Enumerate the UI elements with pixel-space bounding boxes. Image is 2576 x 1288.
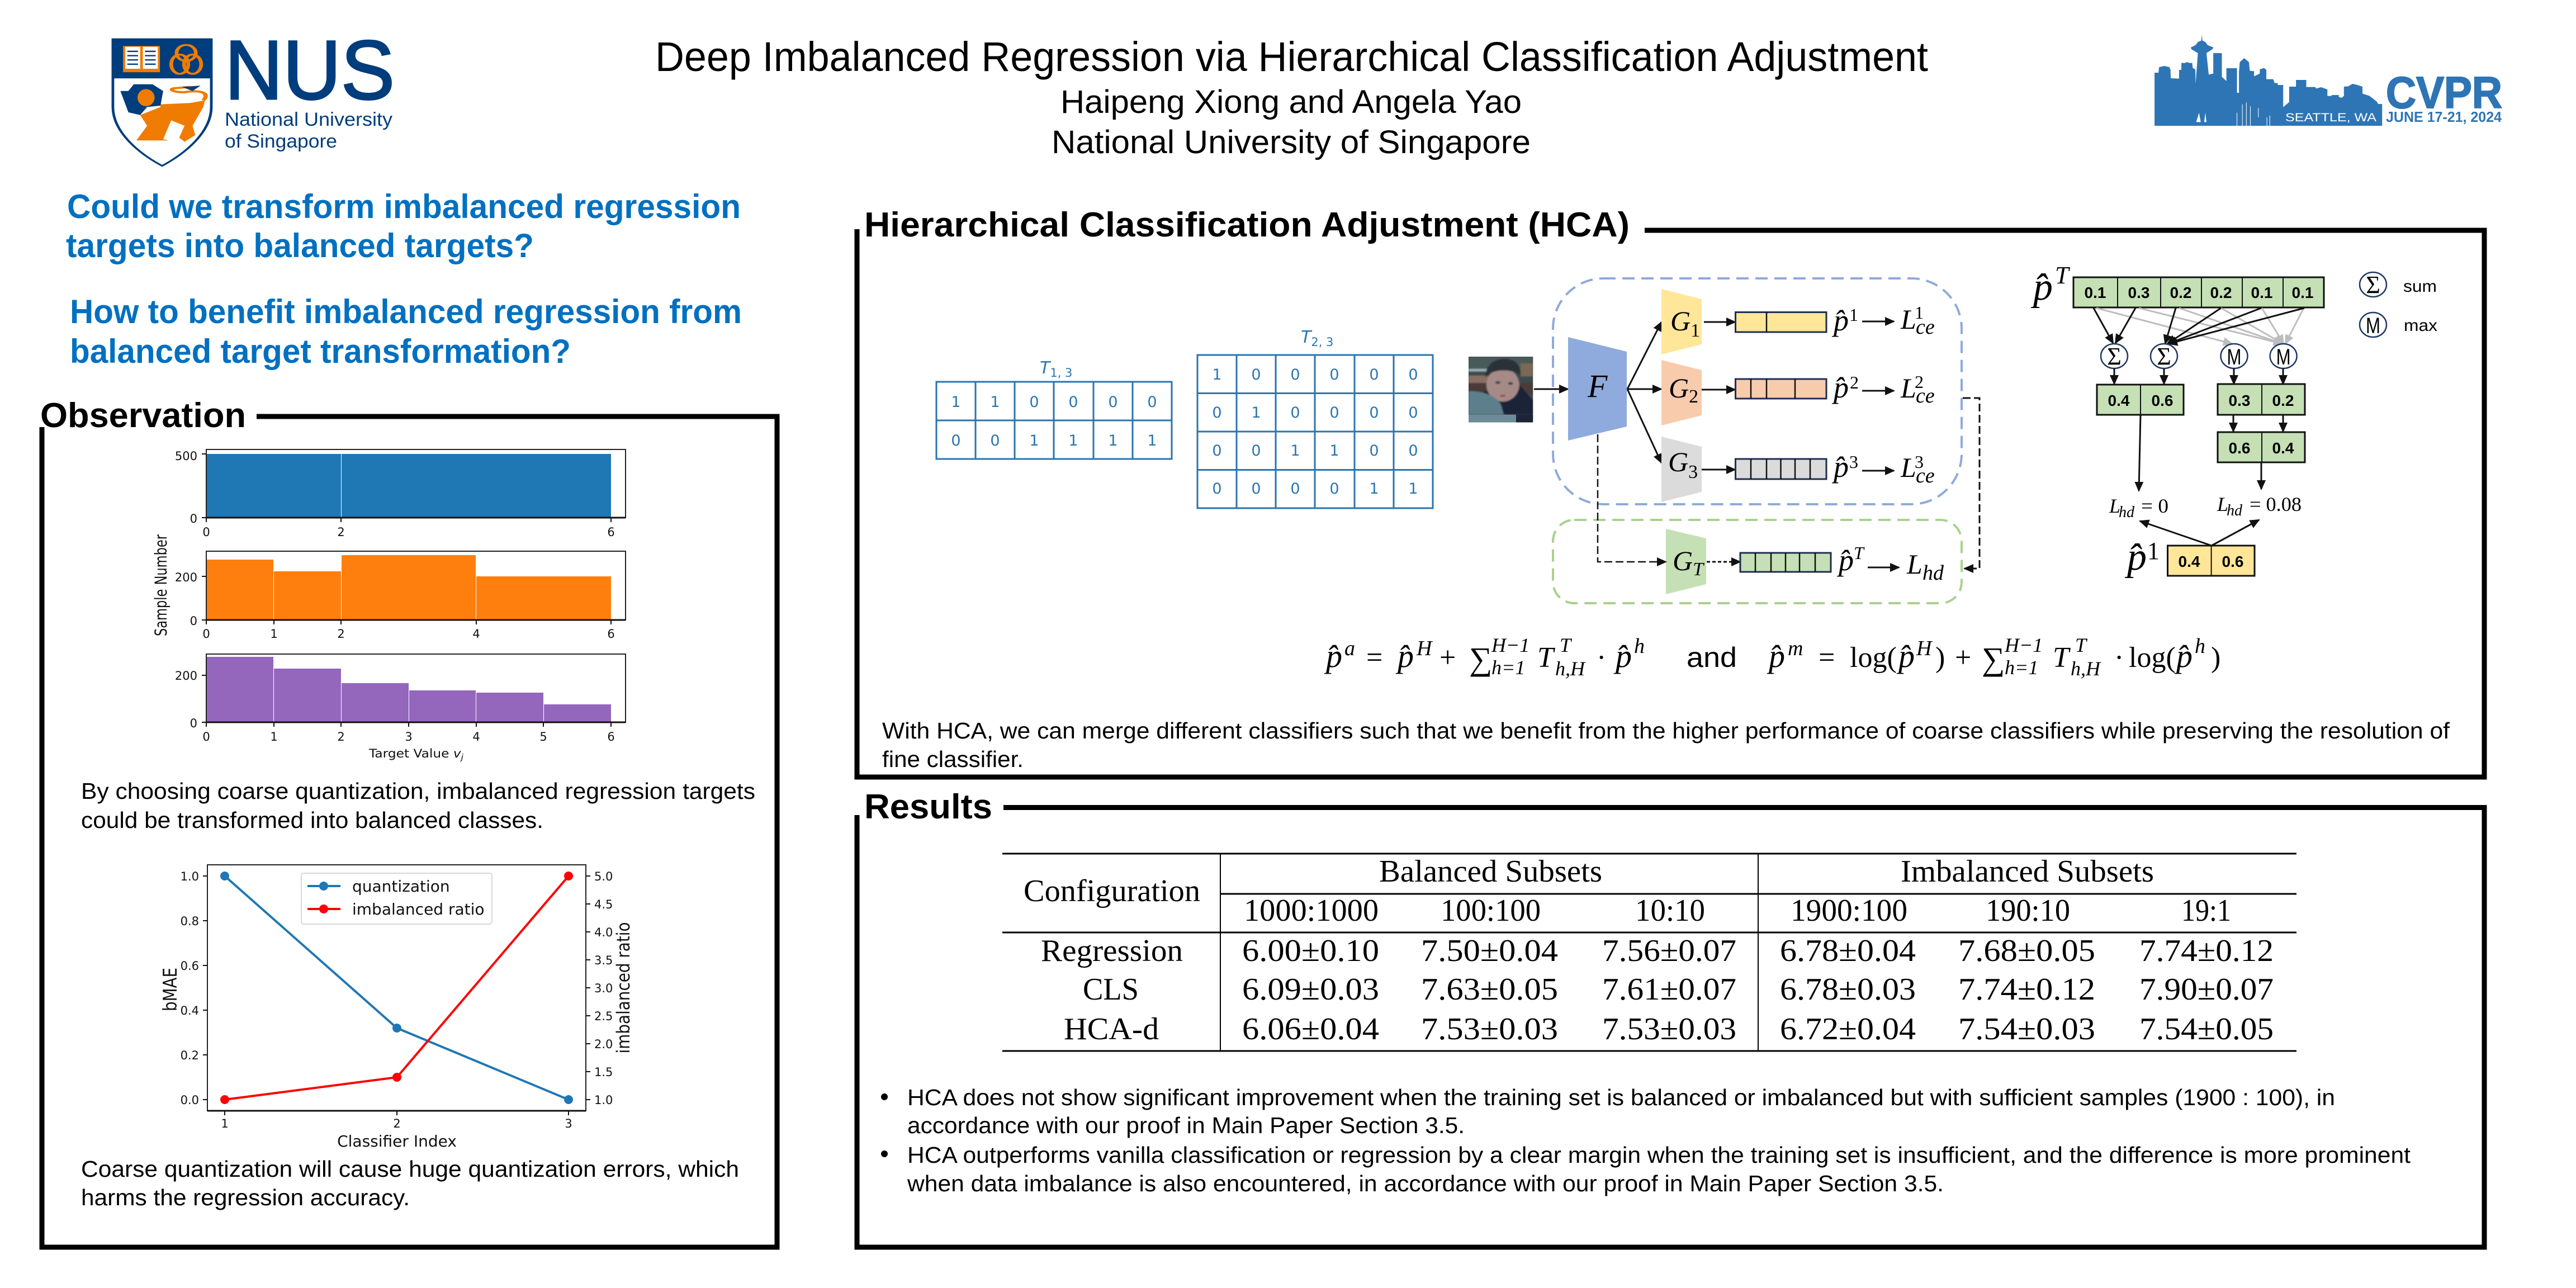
loss label: Lhd = 0.08 (2217, 493, 2302, 519)
legend: sum and max: max (2404, 316, 2437, 335)
results table: 6.06±0.04 (1242, 1012, 1379, 1046)
classifier G3 (1661, 437, 1935, 502)
results table: 190:10 (1986, 893, 2070, 928)
panel border (42, 416, 777, 1247)
question 2: balanced target transformation? (70, 333, 571, 370)
matrix T2,3: 0 (1329, 480, 1339, 498)
dashed group: transformed classifier (1553, 520, 1962, 603)
classifier G3: 3 (1915, 452, 1924, 472)
classifier GT (1666, 529, 1944, 594)
matrix T2,3: 2, 3 (1311, 335, 1333, 349)
classifier GT: G (1673, 545, 1693, 576)
line chart: quantization vs imbalanced ratio: 0.6 (181, 959, 199, 973)
line chart: quantization vs imbalanced ratio: 1.0 (181, 870, 199, 883)
line chart: quantization vs imbalanced ratio: 4.0 (594, 926, 613, 939)
line chart: quantization vs imbalanced ratio: bMAE (159, 968, 182, 1011)
box: normalized result: 0.4 (2272, 439, 2294, 457)
dashed arrow: classifiers to Lhd (1963, 398, 1980, 569)
equations: p̂ (2174, 638, 2193, 674)
histogram 1: blue: 0 (202, 525, 210, 539)
histogram 1: blue: 500 (175, 449, 197, 463)
logo text: of Singapore: of Singapore (225, 131, 337, 152)
research questions (66, 188, 742, 370)
equations: log( (2129, 642, 2176, 674)
equations: h (2195, 634, 2205, 658)
matrix T1,3: 1 (1068, 432, 1078, 449)
equations: a (1344, 637, 1355, 660)
matrix T2,3: 0 (1329, 366, 1339, 383)
matrix T2,3: 0 (1408, 404, 1418, 422)
histogram 3: purple: 0 (190, 717, 197, 730)
histogram 2: orange: 200 (175, 571, 197, 584)
label: p-hat T: p̂ (2030, 266, 2053, 309)
equations: ∑ (1469, 641, 1492, 677)
equations: log( (1850, 642, 1897, 674)
results table: 6.78±0.03 (1780, 972, 1916, 1007)
results table: 6.72±0.04 (1780, 1012, 1916, 1046)
logo: NUS (113, 23, 395, 166)
results table: 7.53±0.03 (1421, 1012, 1558, 1046)
box: max result (2218, 384, 2305, 415)
box: coarse classifier output: 0.4 (2179, 553, 2200, 570)
legend: sum and max: sum (2403, 277, 2437, 296)
classifier G3: L (1900, 452, 1916, 483)
classifier G2: L (1900, 372, 1916, 404)
equations: p̂ (1613, 638, 1632, 674)
results table: HCA-d (1064, 1012, 1159, 1046)
classifier G1: 1 (1849, 305, 1858, 325)
histogram 3: purple: 200 (175, 669, 197, 683)
matrix T1,3: 0 (1029, 394, 1039, 411)
question 1: targets into balanced targets? (66, 227, 534, 264)
histogram 3: purple: 0 (202, 730, 210, 744)
arrows: p1 to losses (2140, 520, 2259, 546)
classifier GT: T (1693, 559, 1704, 580)
results table: 7.56±0.07 (1602, 934, 1736, 968)
matrix T1,3: 0 (1068, 394, 1078, 411)
results table: 7.54±0.03 (1958, 1012, 2095, 1046)
authors: Haipeng Xiong and Angela Yao (1060, 84, 1522, 120)
results table: Regression (1041, 934, 1183, 968)
dashed group: classifiers (1553, 278, 1962, 504)
results table: 7.53±0.03 (1602, 1012, 1736, 1046)
equations: H (1916, 637, 1933, 660)
matrix T1,3: 0 (1147, 394, 1157, 411)
matrix T2,3: T (1301, 328, 1311, 347)
matrix T2,3: 0 (1290, 404, 1300, 422)
axis label: Target Value: Target Value v (369, 747, 460, 760)
box: normalized result: 0.6 (2229, 439, 2250, 457)
line chart: quantization vs imbalanced ratio: 1.5 (594, 1066, 613, 1079)
matrix T1,3: 0 (1108, 394, 1118, 411)
equations: H (1416, 637, 1433, 660)
classifier G2 (1661, 360, 1935, 425)
histogram 1: blue (175, 449, 626, 539)
arrow: image to backbone (1534, 388, 1568, 390)
bar: transformed probabilities: 0.2 (2210, 284, 2232, 301)
results table: 7.61±0.07 (1602, 972, 1736, 1007)
results table: CLS (1083, 972, 1139, 1007)
affiliation: National University of Singapore (1052, 124, 1531, 160)
classifier G1 (1661, 289, 1935, 354)
bar: transformed probabilities: 0.1 (2251, 284, 2272, 301)
bullet 2 (881, 1142, 2411, 1196)
bullet 1: accordance with our proof in Main Paper Section 3.5. (907, 1112, 1465, 1138)
histogram 2: orange (175, 551, 626, 641)
bar: transformed probabilities: 0.1 (2292, 284, 2313, 301)
histogram 1: blue: 6 (607, 525, 615, 539)
bar: transformed probabilities (2073, 277, 2324, 307)
title: Deep Imbalanced Regression via Hierarchical Classification Adjustment (655, 34, 1928, 80)
bullet 2: when data imbalance is also encountered, in accordance with our proof in Main Paper Section 3.5. (907, 1171, 1944, 1196)
matrix T2,3: 0 (1408, 442, 1418, 460)
equations: + (1955, 642, 1971, 674)
line chart: quantization vs imbalanced ratio: 4.5 (594, 898, 613, 911)
bullet 2: HCA outperforms vanilla classification or regression by a clear margin when the training set is insufficient, and the difference is more prominent (907, 1142, 2411, 1168)
line chart: quantization vs imbalanced ratio: 0.4 (181, 1004, 199, 1017)
line chart: quantization vs imbalanced ratio: Classifier Index (337, 1132, 457, 1150)
equations: h=1 (1491, 656, 1525, 679)
results table: 7.74±0.12 (1958, 972, 2095, 1007)
histogram 2: orange: 1 (270, 627, 278, 641)
panel border (857, 229, 2484, 777)
arrows: gray to max nodes (2096, 308, 2304, 344)
box: summed result: 0.6 (2152, 392, 2173, 409)
block: backbone F: F (1587, 368, 1608, 404)
equations: + (1439, 642, 1456, 674)
histogram 2: orange: 4 (472, 627, 480, 641)
diagram: aggregation example (2030, 262, 2437, 579)
matrix T2,3: 0 (1251, 366, 1261, 383)
panel: Results (857, 788, 2484, 1247)
heading: Results: Results (864, 788, 992, 826)
histogram 3: purple: 4 (472, 730, 480, 744)
heading: Observation: Observation (40, 396, 246, 435)
bar: transformed probabilities: 0.2 (2170, 284, 2191, 301)
classifier G2: ce (1916, 384, 1935, 408)
classifier G3: 3 (1849, 452, 1858, 472)
histogram 1: blue: 2 (337, 525, 345, 539)
line chart: quantization vs imbalanced ratio: 1.0 (594, 1093, 613, 1107)
results table: Balanced Subsets (1379, 854, 1602, 889)
equations: ) (2211, 642, 2220, 674)
line chart: quantization vs imbalanced ratio: quantization (352, 877, 450, 896)
matrix T1,3: 1 (1108, 432, 1118, 449)
histogram 1: blue: 0 (190, 512, 197, 525)
classifier G3: p̂ (1831, 450, 1849, 484)
matrix T1,3: 1 (990, 394, 1000, 411)
text: quantization error observation: harms the regression accuracy. (81, 1185, 410, 1210)
line chart: quantization vs imbalanced ratio: 2.0 (594, 1038, 613, 1051)
histogram 3: purple: 1 (270, 730, 278, 744)
matrix T1,3: T (1040, 358, 1050, 378)
equations (1324, 634, 2220, 680)
histogram 2: orange: 2 (337, 627, 345, 641)
line chart: quantization vs imbalanced ratio: 5.0 (594, 870, 613, 883)
equations: T (1560, 634, 1573, 656)
panel: Observation (40, 396, 777, 1247)
axis label: Sample Number: Sample Number (151, 534, 171, 636)
line chart: quantization vs imbalanced ratio: 0.0 (181, 1093, 199, 1107)
matrix T2,3: 1 (1290, 442, 1300, 460)
results table: Imbalanced Subsets (1901, 854, 2154, 889)
results table: 7.54±0.05 (2139, 1012, 2274, 1046)
logo text: date: JUNE 17-21, 2024 (2386, 108, 2502, 125)
legend: sum and max (2360, 271, 2437, 338)
matrix T2,3 (1197, 328, 1433, 508)
line chart: quantization vs imbalanced ratio: 2.5 (594, 1010, 613, 1023)
icon: NUS shield (113, 39, 211, 166)
equations: H−1 (1491, 634, 1530, 656)
results table: 7.63±0.05 (1421, 972, 1558, 1007)
text: balanced classes observation: could be transformed into balanced classes. (81, 807, 543, 833)
matrix T2,3: 0 (1329, 404, 1339, 422)
label: p-hat 1 (2124, 536, 2160, 579)
matrix T2,3: 1 (1408, 480, 1418, 498)
label: p-hat T: T (2055, 262, 2071, 289)
equations: h,H (1555, 657, 1586, 680)
classifier G1: 1 (1690, 320, 1700, 341)
logo: CVPR 2024 Seattle (2154, 35, 2502, 126)
nodes: sum and max: Σ (2157, 343, 2171, 370)
matrix T2,3: 1 (1369, 480, 1379, 498)
matrix T2,3: 0 (1369, 366, 1379, 383)
line chart: quantization vs imbalanced ratio: 3 (565, 1117, 572, 1130)
equations: · (1597, 642, 1606, 674)
matrix T2,3: 0 (1251, 442, 1261, 460)
matrix T1,3: 0 (951, 432, 961, 449)
legend: sum and max: M (2366, 314, 2380, 338)
logo wordmark NUS: NUS (225, 23, 395, 117)
equations: T (1537, 642, 1555, 674)
matrix T2,3: 1 (1251, 404, 1261, 422)
label: p-hat 1: p̂ (2124, 536, 2147, 579)
arrows: backbone to classifiers (1627, 322, 1661, 463)
equations: H−1 (2004, 634, 2043, 656)
histogram 3: purple: 2 (337, 730, 345, 744)
line chart: quantization vs imbalanced ratio: 0.8 (181, 915, 199, 928)
equations: h=1 (2005, 656, 2038, 679)
equations: h (1634, 634, 1645, 658)
loss label: Lhd = 0: L (2109, 495, 2120, 517)
histogram 3: purple: 3 (405, 730, 413, 744)
bullet 1 (881, 1085, 2335, 1138)
box: summed result: 0.4 (2108, 392, 2130, 409)
matrix T2,3: 0 (1408, 366, 1418, 383)
bullet 1: HCA does not show significant improvement when the training set is balanced or imbalanced but with sufficient samples (1900 : 100), in (907, 1085, 2335, 1110)
panel: Hierarchical Classification Adjustment (857, 206, 2484, 777)
results table: 6.00±0.10 (1242, 934, 1379, 968)
equations: T (2075, 634, 2088, 656)
equations: p̂ (1767, 638, 1785, 674)
line chart: quantization vs imbalanced ratio: 1 (221, 1117, 229, 1130)
matrix T1,3: 1 (1029, 432, 1039, 449)
loss label: Lhd = 0: = 0 (2141, 495, 2168, 517)
box: summed result (2097, 385, 2184, 415)
icon: Seattle skyline (2154, 35, 2382, 126)
box: coarse classifier output: 0.6 (2222, 553, 2243, 570)
text: quantization error observation: Coarse quantization will cause huge quantization errors, which (81, 1156, 739, 1182)
histogram 2: orange: 6 (607, 627, 615, 641)
label: p-hat T (2030, 262, 2071, 309)
matrix T2,3: 1 (1329, 442, 1339, 460)
results table (1002, 854, 2296, 1051)
box: max result: 0.2 (2272, 392, 2294, 409)
loss label: Lhd = 0.08: hd (2227, 502, 2243, 519)
box: normalized result (2218, 432, 2305, 462)
block: backbone F (1568, 337, 1627, 441)
equations: m (1788, 637, 1803, 660)
classifier G2: p̂ (1831, 371, 1849, 404)
results table: 1000:1000 (1244, 893, 1379, 928)
matrix T2,3: 0 (1212, 480, 1222, 498)
classifier G3: G (1668, 446, 1688, 477)
classifier G2: 2 (1850, 372, 1859, 392)
equations: p̂ (1896, 638, 1915, 674)
classifier G1: ce (1916, 315, 1935, 339)
line chart: quantization vs imbalanced ratio: imbalanced ratio (352, 900, 485, 918)
results table: 6.78±0.04 (1780, 934, 1916, 968)
classifier G1: 1 (1915, 302, 1924, 323)
matrix T2,3: 0 (1251, 480, 1261, 498)
question 1: Could we transform imbalanced regression (67, 188, 741, 225)
dashed arrow: backbone to GT (1598, 434, 1666, 562)
heading: HCA: Hierarchical Classification Adjustment (HCA) (864, 206, 1630, 244)
line chart: quantization vs imbalanced ratio (159, 865, 634, 1150)
results table: 6.09±0.03 (1242, 972, 1379, 1007)
line chart: quantization vs imbalanced ratio: 3.5 (594, 954, 613, 967)
matrix T2,3: 1 (1212, 366, 1222, 383)
logo text: National University: National University (225, 109, 392, 130)
logo text: SEATTLE, WA: SEATTLE, WA (2285, 111, 2376, 124)
matrix T2,3: 0 (1369, 404, 1379, 422)
photo: input child image (1469, 357, 1533, 423)
loss label: Lhd = 0: hd (2119, 504, 2135, 521)
matrix T2,3: 0 (1290, 480, 1300, 498)
bar: transformed probabilities: 0.1 (2085, 284, 2106, 301)
axis label: Target Value: j (460, 753, 463, 762)
matrix T2,3: 0 (1290, 366, 1300, 383)
results table: Configuration (1024, 874, 1200, 908)
legend: sum and max: Σ (2366, 271, 2380, 299)
nodes: sum and max: M (2227, 345, 2242, 370)
box: coarse classifier output (2168, 546, 2255, 576)
classifier G3: ce (1916, 464, 1935, 487)
loss label: Lhd = 0 (2109, 495, 2168, 521)
line chart: quantization vs imbalanced ratio: 0.2 (181, 1049, 199, 1062)
results table: 1900:100 (1791, 893, 1907, 928)
classifier G2: G (1669, 372, 1689, 404)
histogram 3: purple (175, 654, 626, 744)
classifier GT: T (1854, 543, 1865, 563)
matrix T1,3: 1 (1147, 432, 1157, 449)
logo text: CVPR: CVPR (2386, 68, 2502, 117)
line chart: quantization vs imbalanced ratio: imbalanced ratio (613, 922, 634, 1053)
equations: ) (1935, 642, 1945, 674)
panel border (857, 807, 2484, 1247)
classifier GT: hd (1922, 561, 1944, 585)
classifier G1: L (1900, 304, 1916, 335)
equations: = (1819, 642, 1835, 674)
equations: h,H (2071, 657, 2101, 680)
text: HCA description: With HCA, we can merge different classifiers such that we benefit from the higher performance of coarse classifiers while preserving the resolution of (882, 718, 2450, 744)
nodes: sum and max: M (2276, 345, 2291, 370)
nodes: sum and max: Σ (2107, 343, 2122, 370)
results table: 7.90±0.07 (2139, 972, 2274, 1007)
matrix T1,3 (936, 358, 1172, 459)
equations: p̂ (1395, 638, 1414, 674)
text: HCA description: fine classifier. (882, 746, 1024, 772)
text: balanced classes observation: By choosing coarse quantization, imbalanced regression targets (81, 778, 755, 804)
histogram 3: purple: 6 (607, 730, 615, 744)
matrix T2,3: 0 (1369, 442, 1379, 460)
results table: 10:10 (1635, 893, 1705, 928)
question 2: How to benefit imbalanced regression from (70, 293, 742, 330)
arrows: black to sum nodes (2094, 308, 2304, 344)
equations: and (1687, 642, 1737, 673)
results table: 7.74±0.12 (2139, 934, 2274, 968)
results table: 7.68±0.05 (1958, 934, 2095, 968)
line chart: quantization vs imbalanced ratio: 3.0 (594, 982, 613, 995)
equations: · (2114, 642, 2124, 674)
classifier GT: L (1906, 548, 1922, 580)
classifier GT: p̂ (1836, 543, 1854, 577)
matrix T2,3: 0 (1212, 442, 1222, 460)
matrix T1,3: 1 (951, 394, 961, 411)
matrix T1,3: 0 (990, 432, 1000, 449)
classifier G2: 2 (1915, 372, 1924, 392)
classifier G3: 3 (1688, 462, 1698, 482)
bar: transformed probabilities: 0.3 (2128, 284, 2149, 301)
results table: 19:1 (2181, 893, 2231, 928)
loss label: Lhd = 0.08: L (2217, 493, 2228, 515)
histogram 2: orange: 0 (190, 614, 197, 628)
classifier G1: G (1670, 305, 1690, 337)
results table: 100:100 (1441, 893, 1541, 928)
histogram 2: orange: 0 (202, 627, 210, 641)
equations: p̂ (1324, 638, 1342, 674)
classifier G1: p̂ (1831, 304, 1849, 337)
nodes: sum and max (2101, 343, 2297, 370)
box: max result: 0.3 (2229, 392, 2250, 409)
loss label: Lhd = 0.08: = 0.08 (2250, 493, 2302, 515)
matrix T2,3: 0 (1212, 404, 1222, 422)
arrows: nodes to boxes (2114, 368, 2283, 491)
equations: = (1366, 642, 1382, 674)
matrix T1,3: 1, 3 (1050, 366, 1072, 380)
results table: 7.50±0.04 (1421, 934, 1558, 968)
line chart: quantization vs imbalanced ratio: 2 (393, 1117, 401, 1130)
histogram 3: purple: 5 (539, 730, 547, 744)
classifier G2: 2 (1689, 386, 1698, 407)
equations: T (2053, 642, 2071, 674)
label: p-hat 1: 1 (2147, 537, 2160, 565)
equations: ∑ (1982, 641, 2005, 677)
